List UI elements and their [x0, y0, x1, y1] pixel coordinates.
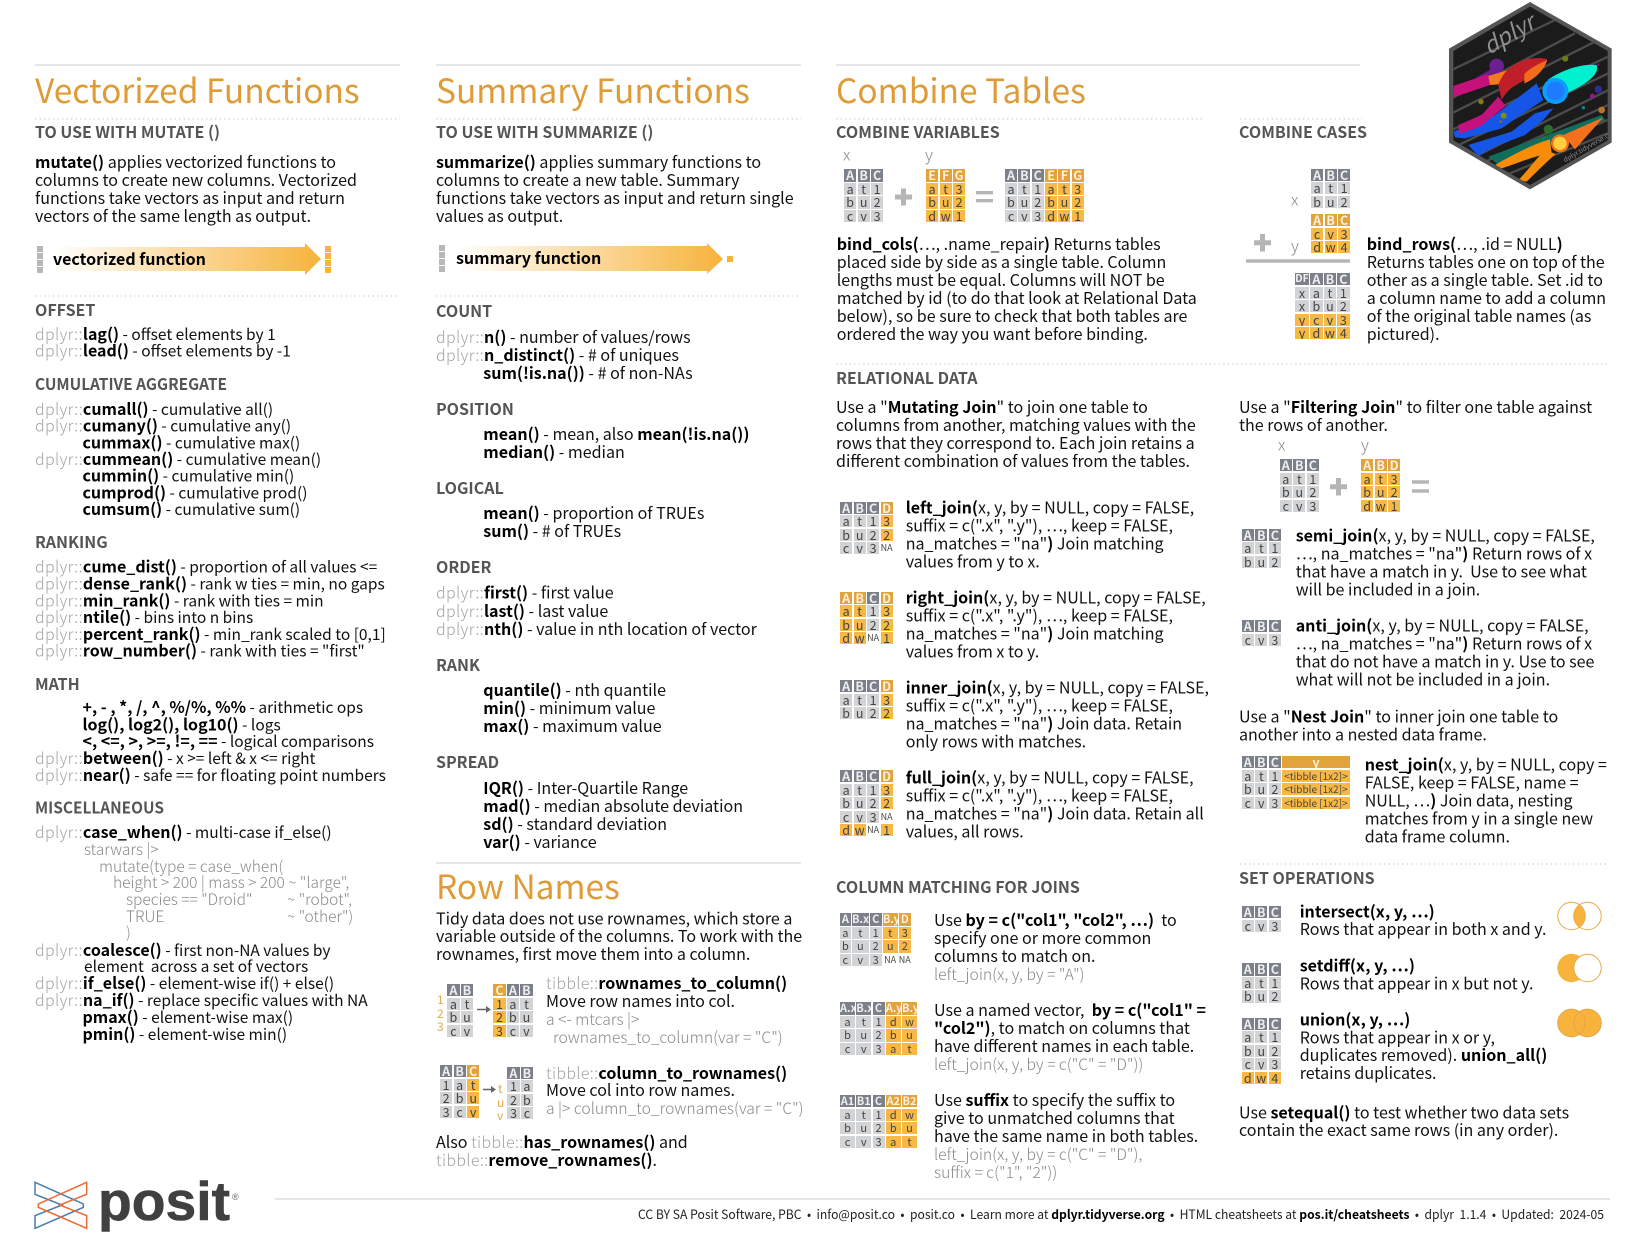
heading: COMBINE VARIABLES	[836, 119, 1000, 143]
column_to_rownames diagram	[440, 1065, 534, 1124]
union	[1242, 1007, 1602, 1086]
full_join: na_matches = "na") Join data. Retain all	[906, 800, 1204, 824]
setdiff	[1242, 953, 1601, 1004]
logical: sum() - # of TRUEs	[483, 518, 621, 542]
venn: union	[1557, 1009, 1602, 1037]
title: Combine Tables	[836, 64, 1086, 113]
union: duplicates removed). union_all()	[1300, 1042, 1547, 1066]
title: Row Names	[436, 860, 620, 909]
right_join: na_matches = "na") Join matching	[906, 620, 1164, 644]
miscellaneous: ~ "robot",	[287, 888, 352, 910]
ranking: dplyr::min_rank() - rank with ties = min	[35, 588, 324, 612]
rownames_to_column text	[546, 970, 787, 1048]
inner_join: na_matches = "na") Join data. Retain	[906, 710, 1182, 734]
heading: SET OPERATIONS	[1239, 865, 1375, 889]
bind_rows text: of the original table names (as	[1367, 303, 1591, 327]
suffix: give to unmatched columns that	[934, 1105, 1175, 1129]
ranking	[35, 529, 386, 662]
math: dplyr::between() - x >= left & x <= right	[35, 745, 316, 769]
union: Rows that appear in x or y,	[1300, 1024, 1495, 1048]
position: median() - median	[483, 439, 625, 463]
logical: LOGICAL	[436, 475, 504, 499]
heading: RELATIONAL DATA	[836, 365, 978, 389]
heading: TO USE WITH SUMMARIZE ()	[436, 119, 653, 143]
filtering join intro: Use a "Filtering Join" to filter one table against	[1239, 394, 1592, 418]
setdiff: Rows that appear in x but not y.	[1300, 970, 1534, 994]
miscellaneous: pmax() - element-wise max()	[82, 1004, 293, 1028]
nest join intro	[1239, 704, 1558, 746]
rownames_to_column diagram: 1	[437, 991, 444, 1008]
miscellaneous: dplyr::na_if() - replace specific values with NA	[35, 987, 368, 1011]
count: COUNT	[436, 298, 492, 322]
order: ORDER	[436, 554, 491, 578]
rank: RANK	[436, 652, 481, 676]
suffix: have the same name in both tables.	[934, 1123, 1198, 1147]
right_join: values from x to y.	[906, 638, 1039, 662]
vectorized function arrow	[37, 243, 331, 275]
column_to_rownames text: a |> column_to_rownames(var = "C")	[546, 1096, 804, 1119]
ranking: dplyr::ntile() - bins into n bins	[35, 604, 253, 628]
miscellaneous: starwars |>	[84, 838, 159, 860]
miscellaneous: dplyr::if_else() - element-wise if() + else()	[35, 970, 334, 994]
ranking: dplyr::percent_rank() - min_rank scaled to [0,1]	[35, 621, 386, 645]
miscellaneous: dplyr::case_when() - multi-case if_else()	[35, 819, 332, 843]
bind_cols text: lengths must be equal. Columns will NOT be	[837, 267, 1165, 291]
full_join: suffix = c(".x", ".y"), …, keep = FALSE,	[906, 782, 1173, 806]
rownames_to_column diagram	[437, 984, 534, 1038]
summary function arrow: summary function	[456, 245, 601, 269]
column_to_rownames diagram: u	[497, 1094, 504, 1111]
nest_join	[1242, 752, 1607, 848]
semi_join	[1242, 523, 1595, 601]
rank	[436, 652, 666, 737]
by columns: specify one or more common	[934, 925, 1151, 949]
nest_join: FALSE, keep = FALSE, name =	[1365, 770, 1579, 794]
intersect: intersect(x, y, …)	[1300, 899, 1435, 923]
venn: setdiff	[1557, 954, 1601, 982]
inner_join	[840, 674, 1209, 752]
left_join	[840, 494, 1194, 572]
anti_join: that do not have a match in y. Use to see	[1296, 649, 1595, 673]
intro text: functions take vectors as input and return	[35, 185, 345, 209]
order: dplyr::last() - last value	[436, 598, 608, 622]
column_to_rownames diagram: t	[498, 1080, 503, 1097]
intro text	[436, 906, 802, 965]
logo: posit: posit	[98, 1170, 230, 1232]
left_join: left_join(x, y, by = NULL, copy = FALSE,	[906, 494, 1194, 518]
miscellaneous: MISCELLANEOUS	[35, 794, 164, 818]
anti_join: what will not be included in a join.	[1296, 667, 1550, 691]
named vector	[840, 997, 1206, 1075]
position	[436, 396, 749, 463]
anti_join	[1242, 613, 1595, 691]
filtering join diagram: y	[1361, 432, 1369, 456]
vectorized function arrow: vectorized function	[53, 246, 206, 270]
order	[436, 554, 758, 640]
named vector: "col2"), to match on columns that	[934, 1015, 1190, 1039]
ranking: dplyr::dense_rank() - rank w ties = min, no gaps	[35, 570, 385, 594]
spread: IQR() - Inter-Quartile Range	[483, 775, 688, 799]
icon: dplyr hex logo: dplyr	[1476, 3, 1543, 61]
anti_join: anti_join(x, y, by = NULL, copy = FALSE,	[1296, 613, 1589, 637]
intro text: rownames, first move them into a column.	[436, 941, 750, 965]
bind_rows text: other as a single table. Set .id to	[1367, 267, 1603, 291]
miscellaneous: TRUE	[126, 905, 164, 927]
icon: posit mark	[35, 1182, 87, 1228]
right_join	[840, 584, 1206, 662]
offset: OFFSET	[35, 297, 95, 321]
bind_rows diagram: y	[1291, 232, 1299, 256]
cumulative aggregate: dplyr::cummean() - cumulative mean()	[35, 446, 321, 470]
bind_cols text: placed side by side as a single table. Column	[837, 249, 1166, 273]
suffix: Use suffix to specify the suffix to	[934, 1087, 1175, 1111]
venn: intersect	[1558, 902, 1602, 930]
icon: dplyr hex logo	[1448, 2, 1616, 189]
also note: tibble::remove_rownames().	[436, 1147, 657, 1171]
rownames_to_column text: a <- mtcars |>	[546, 1007, 639, 1030]
named vector: Use a named vector, by = c("col1" =	[934, 997, 1206, 1021]
column_to_rownames text	[546, 1060, 804, 1119]
named vector: left_join(x, y, by = c("C" = "D"))	[934, 1052, 1143, 1075]
bind_cols diagram: y	[925, 142, 933, 166]
nest_join: data frame column.	[1365, 824, 1510, 848]
by columns	[840, 907, 1177, 985]
panel: combine tables	[836, 64, 1607, 1183]
nest join intro: another into a nested data frame.	[1239, 722, 1487, 746]
miscellaneous: species == "Droid"	[126, 888, 252, 910]
rownames_to_column text: Move row names into col.	[546, 988, 735, 1012]
math: log(), log2(), log10() - logs	[82, 712, 281, 736]
by columns: Use by = c("col1", "col2", …) to	[934, 907, 1177, 931]
semi_join: …, na_matches = "na") Return rows of x	[1296, 541, 1592, 565]
math: MATH	[35, 671, 80, 695]
cumulative aggregate: cumsum() - cumulative sum()	[82, 496, 300, 520]
miscellaneous: mutate(type = case_when(	[99, 855, 283, 877]
rownames_to_column diagram: 2	[437, 1005, 444, 1022]
column_to_rownames text: Move col into row names.	[546, 1077, 735, 1101]
bind_cols text: ordered the way you want before binding.	[837, 321, 1148, 345]
title: Vectorized Functions	[35, 64, 360, 113]
intro text: values as output.	[436, 203, 563, 227]
by columns: left_join(x, y, by = "A")	[934, 962, 1085, 985]
named vector: have different names in each table.	[934, 1033, 1194, 1057]
filtering join diagram: x	[1278, 432, 1286, 456]
count: dplyr::n_distinct() - # of uniques	[436, 342, 679, 366]
intro text: columns to create new columns. Vectorized	[35, 167, 357, 191]
column_to_rownames text: tibble::column_to_rownames()	[546, 1060, 787, 1084]
nest_join: matches from y in a single new	[1365, 806, 1593, 830]
rownames_to_column text: rownames_to_column(var = "C")	[553, 1025, 783, 1048]
intro text: vectors of the same length as output.	[35, 203, 311, 227]
filtering join diagram	[1278, 432, 1429, 513]
intro text: functions take vectors as input and return single	[436, 185, 794, 209]
icon: dplyr hex logo: dplyr.tidyverse.org	[1561, 126, 1616, 164]
miscellaneous: ~ "other")	[287, 905, 353, 927]
cumulative aggregate: dplyr::cumany() - cumulative any()	[35, 413, 291, 437]
position: POSITION	[436, 396, 514, 420]
intersect: Rows that appear in both x and y.	[1300, 916, 1546, 940]
footer credits: CC BY SA Posit Software, PBC • info@posit.co • posit.co • Learn more at dplyr.tidyverse.org • HTML cheatsheets at pos.it/cheatsheets • dplyr 1.1.4 • Updated: 2024-05	[638, 1204, 1604, 1223]
mutating join intro: columns from another, matching values with the	[836, 412, 1196, 436]
logo: posit: ®	[232, 1192, 239, 1202]
heading: TO USE WITH MUTATE ()	[35, 119, 220, 143]
mutating join intro: rows that they correspond to. Each join retains a	[836, 430, 1195, 454]
also note: Also tibble::has_rownames() and	[436, 1129, 688, 1153]
full_join	[840, 764, 1204, 842]
bind_cols text	[837, 231, 1197, 345]
heading: COLUMN MATCHING FOR JOINS	[836, 874, 1080, 898]
full_join: full_join(x, y, by = NULL, copy = FALSE,	[906, 764, 1194, 788]
order: dplyr::nth() - value in nth location of vector	[436, 616, 758, 640]
cumulative aggregate: cumprod() - cumulative prod()	[82, 479, 307, 503]
anti_join: …, na_matches = "na") Return rows of x	[1296, 631, 1592, 655]
bind_cols diagram: x	[843, 142, 851, 166]
spread: sd() - standard deviation	[483, 811, 667, 835]
mutating join intro: different combination of values from the tables.	[836, 448, 1190, 472]
panel: vectorized functions	[35, 64, 386, 1045]
cumulative aggregate: cummax() - cumulative max()	[82, 429, 300, 453]
cumulative aggregate: dplyr::cumall() - cumulative all()	[35, 396, 273, 420]
intro text: mutate() applies vectorized functions to	[35, 149, 336, 173]
miscellaneous: element across a set of vectors	[84, 955, 308, 977]
bind_cols text: matched by id (to do that look at Relational Data	[837, 285, 1197, 309]
miscellaneous: dplyr::coalesce() - first non-NA values by	[35, 937, 330, 961]
cumulative aggregate	[35, 371, 321, 520]
count: sum(!is.na()) - # of non-NAs	[483, 360, 693, 384]
miscellaneous: )	[126, 921, 131, 943]
offset: dplyr::lead() - offset elements by -1	[35, 338, 291, 362]
math: dplyr::near() - safe == for floating point numbers	[35, 762, 386, 786]
math: +, - , *, /, ^, %/%, %% - arithmetic ops	[82, 694, 363, 718]
nest_join: nest_join(x, y, by = NULL, copy =	[1365, 752, 1607, 776]
suffix: left_join(x, y, by = c("C" = "D"),	[934, 1142, 1142, 1165]
offset: dplyr::lag() - offset elements by 1	[35, 321, 276, 345]
spread: var() - variance	[483, 829, 597, 853]
spread: SPREAD	[436, 749, 499, 773]
position: mean() - mean, also mean(!is.na())	[483, 421, 749, 445]
union: retains duplicates.	[1300, 1060, 1436, 1084]
miscellaneous: height > 200 | mass > 200 ~ "large",	[113, 871, 349, 893]
logical: mean() - proportion of TRUEs	[483, 500, 704, 524]
mutating join intro	[836, 394, 1196, 472]
intro text: summarize() applies summary functions to	[436, 149, 761, 173]
bind_cols text: bind_cols(…, .name_repair) Returns tables	[837, 231, 1161, 255]
bind_cols text: below), so be sure to check that both tables are	[837, 303, 1188, 327]
math	[35, 671, 386, 786]
left_join: na_matches = "na") Join matching	[906, 530, 1164, 554]
intro text: columns to create a new table. Summary	[436, 167, 740, 191]
mutating join intro: Use a "Mutating Join" to join one table to	[836, 394, 1148, 418]
also note	[436, 1129, 688, 1171]
bind_rows text	[1367, 231, 1606, 345]
order: dplyr::first() - first value	[436, 580, 614, 604]
by columns: columns to match on.	[934, 943, 1096, 967]
column_to_rownames diagram: v	[497, 1107, 504, 1124]
intro text	[35, 149, 357, 227]
logo: posit	[35, 1170, 239, 1232]
ranking: dplyr::cume_dist() - proportion of all values <=	[35, 554, 378, 578]
count	[436, 298, 693, 384]
bind_cols diagram	[843, 142, 1086, 223]
semi_join: that have a match in y. Use to see what	[1296, 559, 1587, 583]
inner_join: inner_join(x, y, by = NULL, copy = FALSE,	[906, 674, 1209, 698]
spread	[436, 749, 743, 853]
title: Summary Functions	[436, 64, 750, 113]
inner_join: suffix = c(".x", ".y"), …, keep = FALSE,	[906, 692, 1173, 716]
filtering join intro	[1239, 394, 1592, 436]
semi_join: semi_join(x, y, by = NULL, copy = FALSE,	[1296, 523, 1595, 547]
bind_rows text: Returns tables one on top of the	[1367, 249, 1605, 273]
bind_rows text: a column name to add a column	[1367, 285, 1606, 309]
setequal note: contain the exact same rows (in any order).	[1239, 1117, 1558, 1141]
summary function arrow	[439, 243, 733, 274]
inner_join: only rows with matches.	[906, 728, 1086, 752]
suffix: suffix = c("1", "2"))	[934, 1160, 1057, 1183]
spread: mad() - median absolute deviation	[483, 793, 743, 817]
bind_rows text: bind_rows(…, .id = NULL)	[1367, 231, 1563, 255]
left_join: values from y to x.	[906, 548, 1040, 572]
rownames_to_column text: tibble::rownames_to_column()	[546, 970, 787, 994]
right_join: suffix = c(".x", ".y"), …, keep = FALSE,	[906, 602, 1173, 626]
union: union(x, y, …)	[1300, 1007, 1410, 1031]
intro text: Tidy data does not use rownames, which store a	[436, 906, 792, 930]
intro text: variable outside of the columns. To work with the	[436, 923, 802, 947]
setdiff: setdiff(x, y, …)	[1300, 953, 1415, 977]
rank: max() - maximum value	[483, 713, 662, 737]
logical	[436, 475, 704, 542]
panel: summary functions	[436, 64, 794, 853]
semi_join: will be included in a join.	[1296, 577, 1480, 601]
filtering join intro: the rows of another.	[1239, 412, 1388, 436]
rank: quantile() - nth quantile	[483, 677, 666, 701]
nest_join: NULL, …) Join data, nesting	[1365, 788, 1573, 812]
panel: row names	[436, 860, 804, 1171]
rank: min() - minimum value	[483, 695, 656, 719]
cumulative aggregate: cummin() - cumulative min()	[82, 463, 294, 487]
right_join: right_join(x, y, by = NULL, copy = FALSE,	[906, 584, 1206, 608]
nest join intro: Use a "Nest Join" to inner join one table to	[1239, 704, 1558, 728]
bind_rows diagram	[1246, 169, 1352, 341]
ranking: dplyr::row_number() - rank with ties = "first"	[35, 638, 365, 662]
setequal note: Use setequal() to test whether two data sets	[1239, 1099, 1569, 1123]
left_join: suffix = c(".x", ".y"), …, keep = FALSE,	[906, 512, 1173, 536]
intersect	[1242, 902, 1602, 938]
ranking: RANKING	[35, 529, 108, 553]
cumulative aggregate: CUMULATIVE AGGREGATE	[35, 371, 227, 395]
bind_rows text: pictured).	[1367, 321, 1440, 345]
offset	[35, 297, 291, 362]
setequal note	[1239, 1099, 1569, 1141]
count: dplyr::n() - number of values/rows	[436, 324, 691, 348]
miscellaneous	[35, 794, 368, 1045]
miscellaneous: pmin() - element-wise min()	[82, 1021, 287, 1045]
full_join: values, all rows.	[906, 818, 1024, 842]
heading: COMBINE CASES	[1239, 119, 1367, 143]
math: <, <=, >, >=, !=, == - logical comparisons	[82, 728, 374, 752]
bind_rows diagram: x	[1291, 186, 1299, 210]
suffix	[840, 1087, 1198, 1183]
intro text	[436, 149, 794, 227]
rownames_to_column diagram: 3	[437, 1018, 444, 1035]
